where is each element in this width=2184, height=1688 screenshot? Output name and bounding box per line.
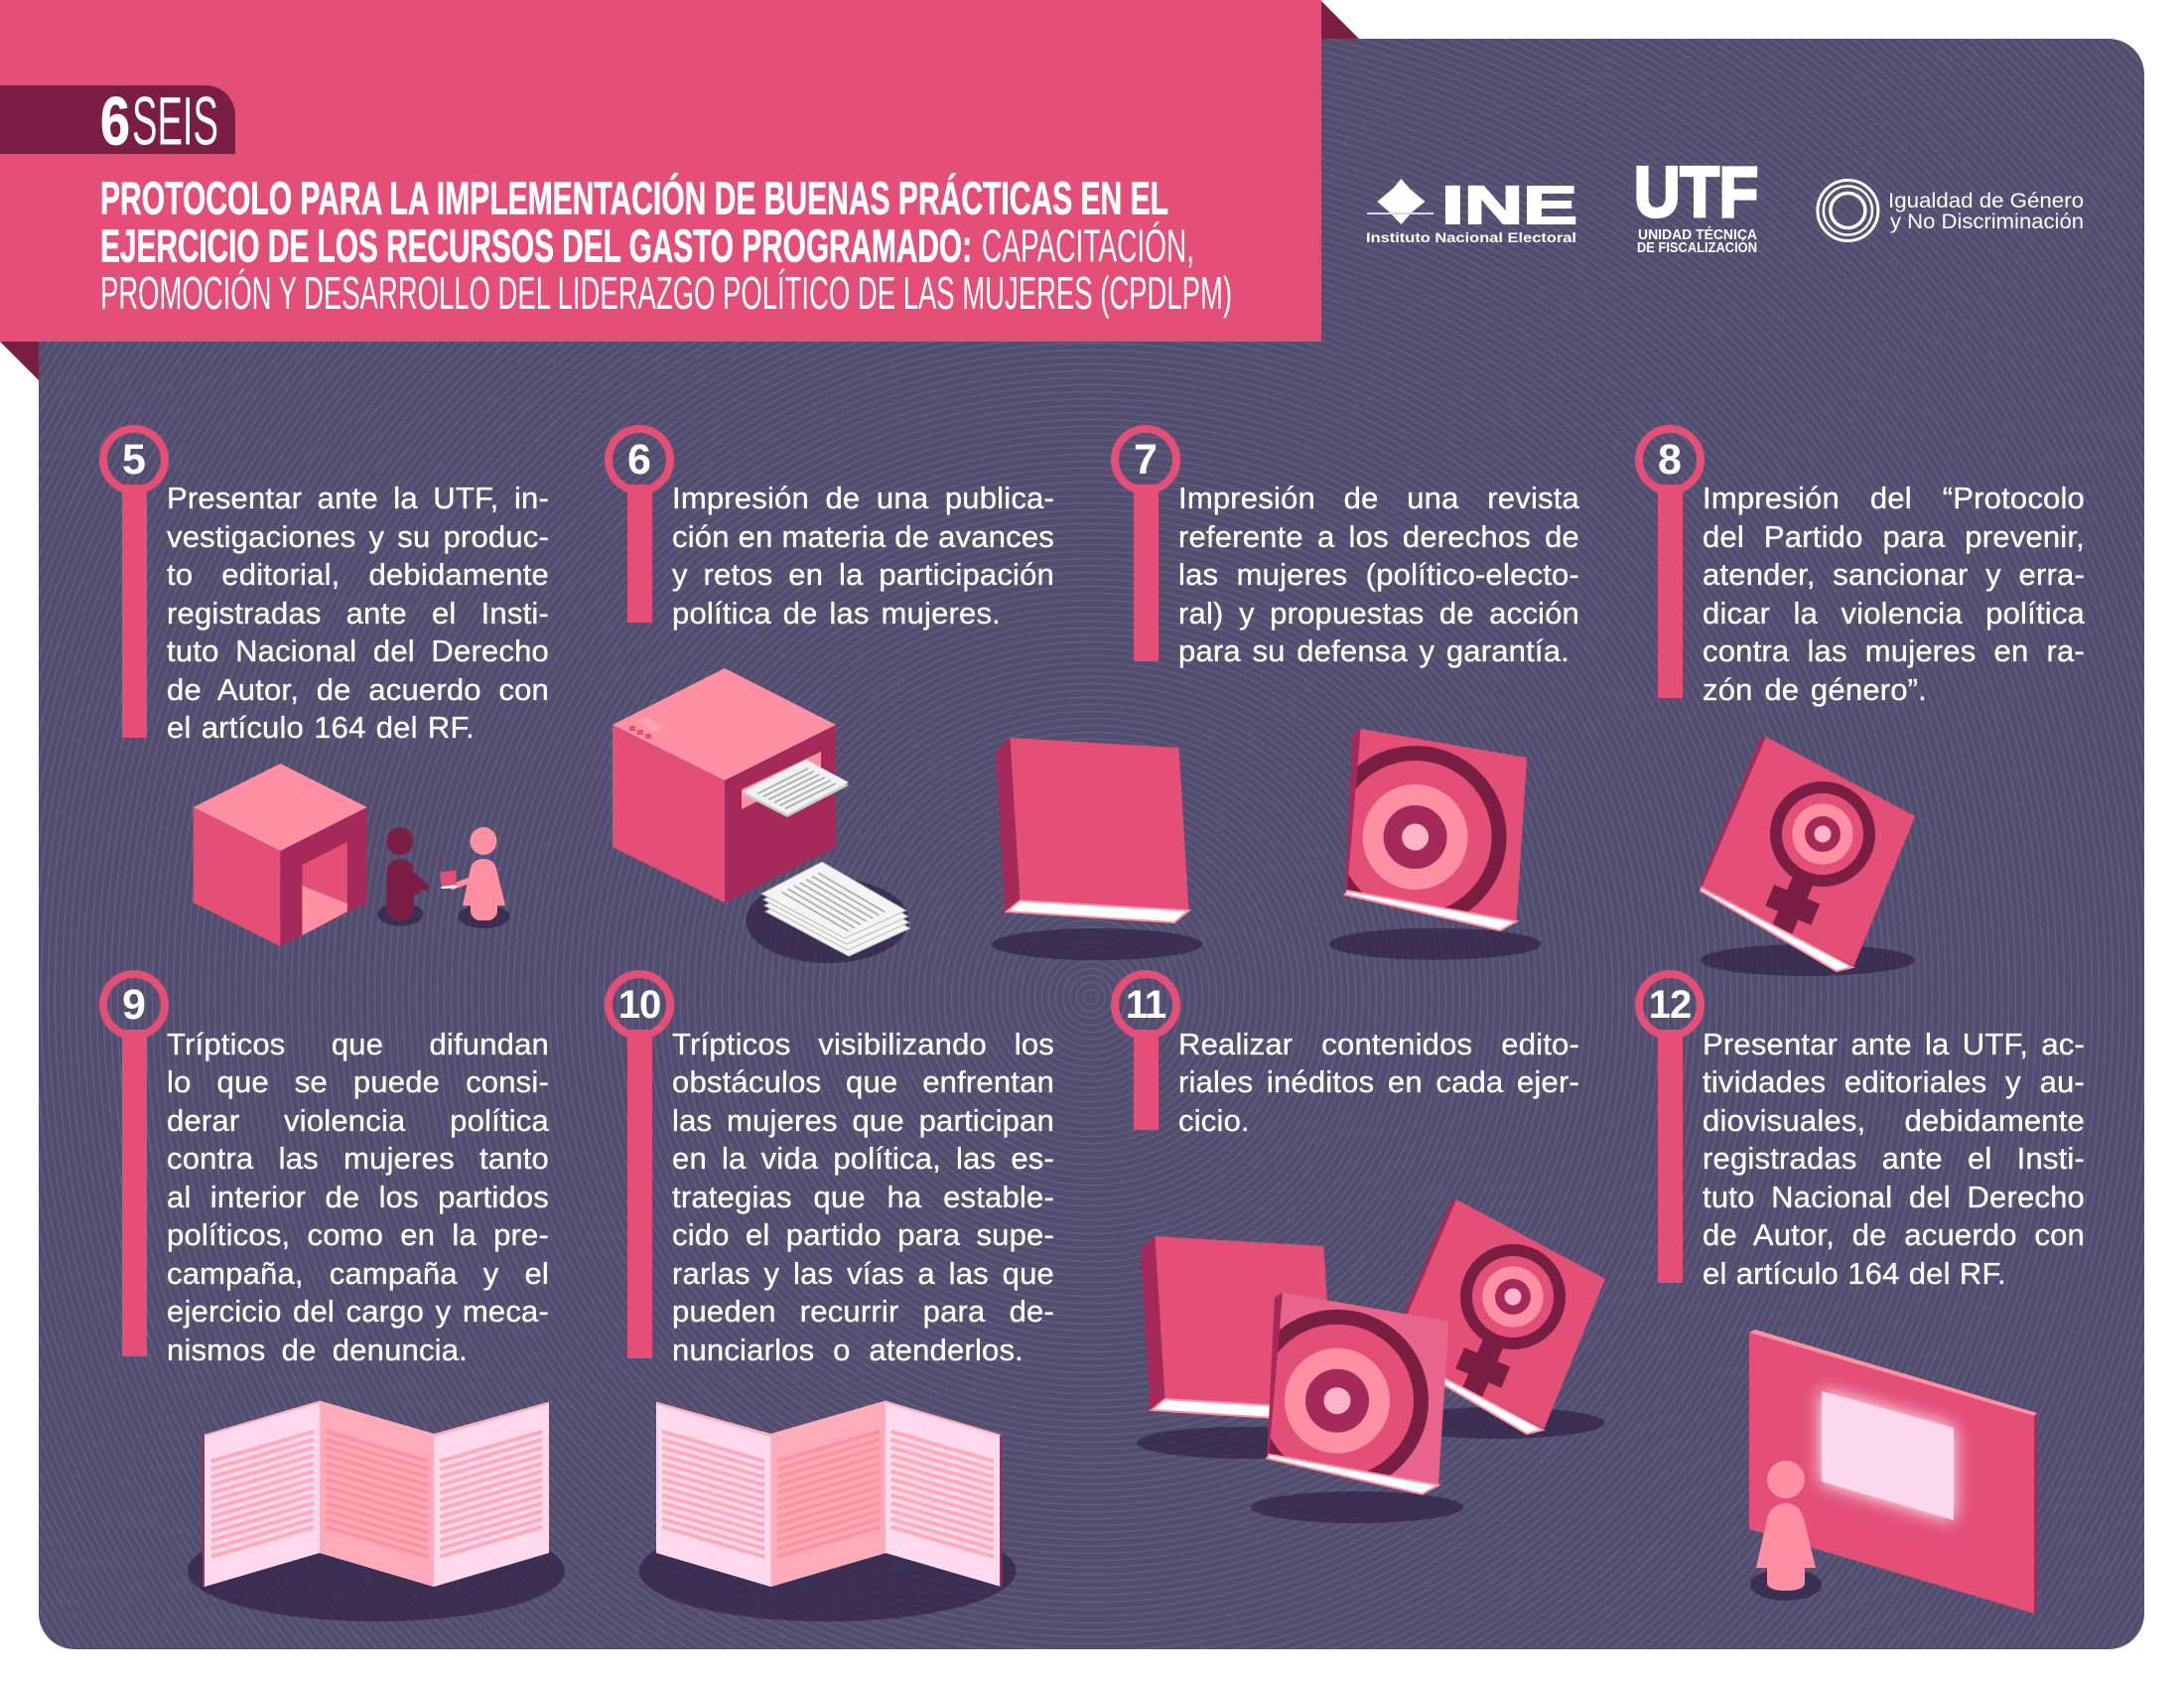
step 9: Trípticos que difundan [167, 1027, 549, 1060]
step 5: el artículo 164 del RF. [167, 710, 475, 745]
step 9: políticos, como en la pre- [167, 1217, 549, 1252]
logo: UTF: DE FISCALIZACIÓN [1637, 238, 1757, 256]
logo: Igualdad de Género [1818, 181, 2084, 240]
header fold: top right corner [1320, 0, 1359, 39]
step 12: registradas ante el Insti- [1703, 1141, 2085, 1176]
step 12: 12 [1649, 983, 1691, 1027]
step 10: obstáculos que enfrentan [672, 1064, 1054, 1099]
step 9: campaña, campaña y el [167, 1255, 549, 1291]
chapter tab [0, 83, 235, 160]
logo: Igualdad de Género: y No Discriminación [1890, 211, 2084, 233]
step 10: Trípticos visibilizando los [672, 1027, 1054, 1060]
step 12: tividades editoriales y au- [1703, 1064, 2085, 1099]
step 10: pueden recurrir para de- [672, 1294, 1054, 1329]
illustration 5: registry building and two people [194, 764, 509, 946]
step 7: referente a los derechos de [1178, 518, 1579, 554]
step 5: registradas ante el Insti- [167, 596, 549, 630]
step 11: riales inéditos en cada ejer- [1178, 1064, 1579, 1099]
step 8: dicar la violencia política [1703, 596, 2085, 630]
chapter tab: SEIS [132, 83, 218, 160]
step 7: para su defensa y garantía. [1178, 633, 1570, 668]
step 10: cido el partido para supe- [672, 1217, 1054, 1252]
step 8 [1635, 425, 2085, 707]
step 6: Impresión de una publica- [672, 481, 1054, 515]
step 10: trategias que ha estable- [672, 1180, 1054, 1213]
step 5: tuto Nacional del Derecho [167, 633, 549, 668]
step 10: en la vida política, las es- [672, 1141, 1054, 1176]
step 9 [99, 970, 549, 1366]
step 7 [1111, 425, 1579, 668]
step 10: 10 [618, 983, 660, 1027]
logo: UTF: UNIDAD TÉCNICA [1638, 226, 1758, 243]
illustration 10: triptych [639, 1401, 1017, 1621]
main title: PROTOCOLO PARA LA IMPLEMENTACIÓN DE BUENAS PRÁCTICAS EN EL [100, 173, 1168, 224]
step 7: las mujeres (político-electo- [1178, 557, 1579, 592]
step 12 [1635, 970, 2085, 1291]
chapter tab: 6 [100, 83, 130, 160]
step 9: al interior de los partidos [167, 1180, 549, 1213]
step 11: 11 [1126, 983, 1165, 1027]
step 12: el artículo 164 del RF. [1703, 1255, 2006, 1291]
step 6 [605, 425, 1054, 631]
step 12: diovisuales, debidamente [1703, 1102, 2085, 1138]
step 6: y retos en la participación [672, 557, 1054, 592]
step 10: nunciarlos o atenderlos. [672, 1333, 1024, 1366]
logo: UTF: UTF [1634, 154, 1758, 232]
illustration 8: book with female symbol [1700, 737, 1915, 976]
step 5 [99, 425, 549, 745]
step 7: 7 [1134, 436, 1158, 484]
step 9: nismos de denuncia. [167, 1333, 468, 1366]
illustration 6: printer and paper stack [613, 668, 910, 963]
illustration 11: group of three books [1137, 1199, 1605, 1523]
logo: Igualdad de Género: Igualdad de Género [1888, 190, 2084, 212]
step 6: ción en materia de avances [672, 518, 1054, 554]
step 11: Realizar contenidos edito- [1178, 1027, 1579, 1060]
logo: INE: INE [1441, 176, 1577, 235]
main title [100, 173, 1232, 319]
step 7: ral) y propuestas de acción [1178, 596, 1579, 630]
step 6: política de las mujeres. [672, 596, 1001, 630]
logo: INE [1366, 176, 1577, 245]
step 5: de Autor, de acuerdo con [167, 671, 549, 707]
main title: EJERCICIO DE LOS RECURSOS DEL GASTO PROGRAMADO: [100, 220, 972, 272]
step 8: contra las mujeres en ra- [1703, 633, 2085, 668]
step 8: zón de género”. [1703, 671, 1927, 707]
step 8: 8 [1658, 436, 1682, 484]
step 5: Presentar ante la UTF, in- [167, 481, 549, 515]
step 11 [1111, 970, 1579, 1138]
step 9: 9 [122, 981, 146, 1029]
step 8: atender, sancionar y erra- [1703, 557, 2085, 592]
step 12: Presentar ante la UTF, ac- [1703, 1027, 2085, 1060]
step 5: to editorial, debidamente [167, 557, 549, 592]
header banner [0, 0, 1321, 342]
illustration 7: target book [1324, 729, 1542, 960]
illustration 7: plain book [992, 738, 1202, 960]
step 9: contra las mujeres tanto [167, 1141, 549, 1176]
step 10: rarlas y las vías a las que [672, 1255, 1054, 1291]
step 9: lo que se puede consi- [167, 1064, 549, 1099]
illustration 12: screen wall and person [1749, 1330, 2037, 1614]
step 10 [605, 970, 1054, 1366]
step 12: tuto Nacional del Derecho [1703, 1180, 2085, 1213]
step 10: las mujeres que participan [672, 1102, 1054, 1138]
logo: INE: Instituto Nacional Electoral [1366, 229, 1576, 245]
step 5: 5 [122, 436, 146, 484]
illustration 9: triptych [188, 1401, 565, 1621]
main title: PROMOCIÓN Y DESARROLLO DEL LIDERAZGO POLÍTICO DE LAS MUJERES (CPDLPM) [100, 267, 1232, 319]
header fold: bottom left corner [0, 342, 39, 380]
step 12: de Autor, de acuerdo con [1703, 1217, 2085, 1252]
main title: CAPACITACIÓN, [982, 220, 1194, 272]
step 7: Impresión de una revista [1178, 481, 1579, 515]
step 9: derar violencia política [167, 1102, 549, 1138]
step 9: ejercicio del cargo y meca- [167, 1294, 549, 1329]
step 8: Impresión del “Protocolo [1703, 481, 2085, 515]
step 5: vestigaciones y su produc- [167, 518, 549, 554]
step 8: del Partido para prevenir, [1703, 518, 2085, 554]
step 11: cicio. [1178, 1102, 1250, 1138]
step 6: 6 [627, 436, 651, 484]
